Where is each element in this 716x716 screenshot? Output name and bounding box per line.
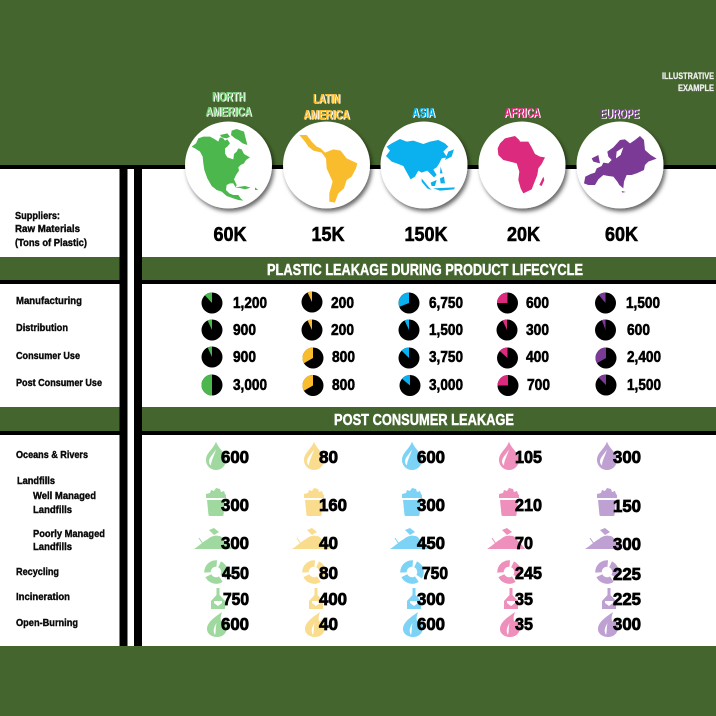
values column: Africa: 105 [515,447,542,467]
values column: Asia: 600 [417,447,445,467]
row labels: post consumer destinations: Incineration [16,591,70,603]
pie column: Europe: 1,500 [626,295,660,312]
pie column: Africa [496,292,550,396]
heading: post consumer leakage: POST CONSUMER LEAKAGE [334,412,514,429]
pie column: Latin America [302,292,355,396]
band: plastic leakage background [142,257,716,280]
values column: Latin America: 80 [319,563,338,583]
bottom green footer [0,646,716,716]
pie column: Africa: 400 [526,349,549,366]
pie column: North America: 3,000 [233,377,267,394]
pie column: Latin America: 200 [331,295,354,312]
label: suppliers raw materials: Raw Materials [15,223,80,235]
note: illustrative example [662,71,714,93]
values column: Latin America: 400 [319,589,347,609]
values column: Asia: 750 [422,563,448,583]
row labels: lifecycle stages: Manufacturing [16,295,82,307]
label: North America [206,89,253,120]
pie column: Asia: 1,500 [429,322,463,339]
band: post consumer background [142,407,716,431]
values column: Europe: 300 [613,447,641,467]
row labels: lifecycle stages: Post Consumer Use [16,377,102,389]
values column: Africa: 210 [515,495,542,515]
values column: Asia [417,447,448,634]
values column: Asia: 300 [417,495,445,515]
icon column: Africa [487,442,525,637]
region: North America [185,89,272,246]
values column: Asia: 450 [417,533,445,553]
values column: North America: 600 [221,447,249,467]
values column: North America [221,447,249,634]
values column: Latin America [319,447,347,634]
row labels: lifecycle stages: Consumer Use [16,350,80,362]
label: North America: NORTH [213,90,246,104]
values column: Latin America: 40 [319,533,338,553]
values column: Asia: 600 [417,614,445,634]
values column: Africa: 35 [515,614,533,634]
values column: Europe: 150 [613,496,641,516]
label: Europe: EUROPE [601,106,640,122]
band: plastic leakage left section [0,257,120,280]
pie column: Asia: 6,750 [429,295,463,312]
pie column: Europe: 600 [627,322,650,339]
region: Africa [478,105,566,246]
value: 15K: 15K [312,223,345,246]
pie column: North America: 900 [233,349,256,366]
values column: North America: 450 [222,563,249,583]
band: post consumer left section [0,407,120,431]
row labels: post consumer destinations: Landfills [33,541,72,553]
map: North America [192,129,258,201]
row labels: post consumer destinations: Landfills [17,475,55,487]
pie column: North America [202,292,267,396]
icon column: North America [194,442,232,637]
pie column: Africa: 700 [527,377,550,394]
pie column: Asia: 3,000 [429,377,463,394]
values column: Africa: 245 [515,563,542,583]
pie column: North America: 1,200 [233,295,267,312]
pie column: Europe: 1,500 [627,377,661,394]
label: North America: AMERICA [206,104,252,119]
vertical black bar right [134,168,142,646]
region: Asia [380,105,468,246]
row labels: post consumer destinations: Well Managed [33,490,96,502]
top green header [0,0,716,165]
label: suppliers raw materials: (Tons of Plastic) [15,237,87,249]
pie column: Europe: 2,400 [627,349,661,366]
pie column: Africa: 300 [526,322,549,339]
label: North America: AMERICA [206,104,253,120]
region: Latin America [283,91,370,246]
region: Europe [576,106,664,246]
values column: Africa: 35 [515,589,533,609]
label: Asia: ASIA [413,106,436,120]
label: Africa: AFRICA [505,106,541,120]
values column: Africa: 70 [515,533,533,553]
globe: Europe [576,122,664,208]
values column: North America: 600 [221,614,249,634]
label: Latin America: AMERICA [304,107,350,122]
label: Latin America: LATIN [313,91,340,106]
values column: North America: 300 [221,533,249,553]
values column: Latin America: 160 [319,495,347,515]
row labels: post consumer destinations: Open-Burning [16,617,78,629]
label: Latin America: AMERICA [304,108,351,122]
heading: plastic leakage during product lifecycle: PLASTIC LEAKAGE DURING PRODUCT LIFECYCLE [267,262,583,279]
row labels: lifecycle stages: Distribution [16,322,68,334]
pie column: Africa: 600 [526,295,549,312]
map: Africa [498,136,545,193]
row labels: post consumer destinations: Oceans & Rivers [16,449,88,461]
globe: North America [185,122,272,208]
label: Latin America: LATIN [314,92,341,106]
globe: Africa [478,122,566,208]
map: Europe [584,136,657,193]
map: Latin America [299,135,357,203]
values column: North America: 300 [221,495,249,515]
values column: Latin America: 80 [319,447,338,467]
values column: Europe: 300 [613,534,641,554]
header black rule [0,165,716,169]
label: Latin America [304,91,351,122]
label: suppliers raw materials: Suppliers: [15,210,60,222]
values column: Asia: 300 [417,589,445,609]
values column: Africa [515,447,542,634]
values column: Europe: 225 [613,589,641,609]
value: 20K: 20K [507,223,540,246]
pie column: Asia: 3,750 [429,349,463,366]
label: suppliers raw materials [15,210,87,249]
values column: North America: 750 [223,589,249,609]
values column: Europe: 225 [613,564,641,584]
map: Asia [386,139,455,191]
values column: Europe: 300 [613,614,641,634]
label: Europe: EUROPE [600,106,639,121]
vertical black bar left [120,168,128,646]
label: Asia: ASIA [412,105,435,120]
label: Africa: AFRICA [504,105,540,120]
globe: Asia [380,122,468,208]
globe: Latin America [283,122,370,208]
value: 60K: 60K [605,223,638,246]
row labels: lifecycle stages [16,295,102,389]
pie column: Latin America: 800 [332,377,355,394]
icon column: Latin America [292,442,330,637]
value: 150K: 150K [404,223,448,246]
row labels: post consumer destinations: Landfills [33,504,72,516]
pie column: Latin America: 200 [331,322,354,339]
pie column: Latin America: 800 [332,349,355,366]
values column: Europe [613,447,641,634]
row labels: post consumer destinations [16,449,105,629]
icon column: Europe [585,442,623,637]
row labels: post consumer destinations: Recycling [16,566,59,578]
value: 60K: 60K [214,223,247,246]
pie column: Asia [398,292,463,396]
label: North America: NORTH [212,89,245,104]
pie column: Europe [595,292,661,396]
row labels: post consumer destinations: Poorly Managed [33,528,105,540]
values column: Latin America: 40 [319,614,338,634]
pie column: North America: 900 [233,322,256,339]
icon column: Asia [390,442,428,637]
